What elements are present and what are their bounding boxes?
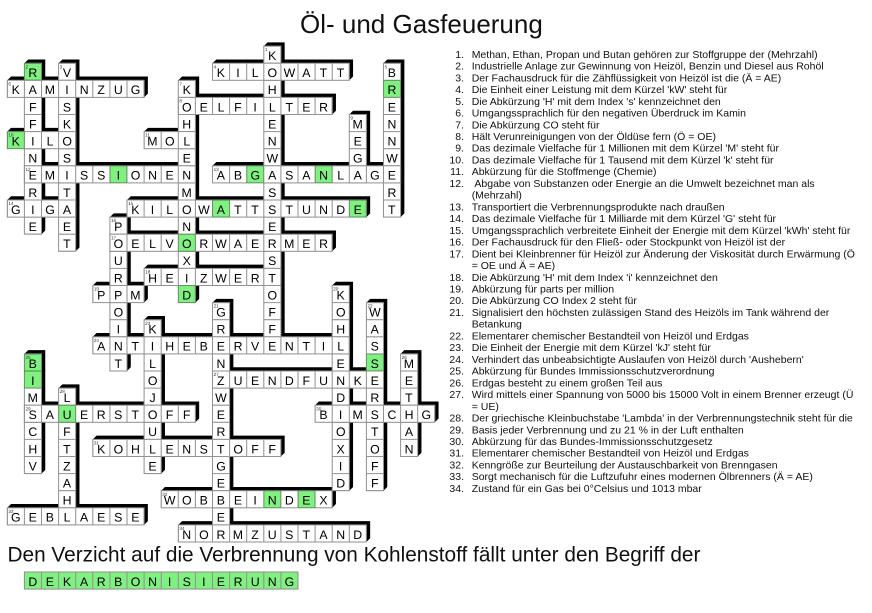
clue 22: 22. <box>449 330 464 342</box>
word 22 down: WASSERSTOFF <box>366 300 388 505</box>
clue list <box>449 49 855 495</box>
clue 30: 30. <box>449 436 464 448</box>
clue 17: Dient bei Kleinbrenner für Heizöl zur Änderung der Viskosität durch Erwärmung (Ö <box>472 248 855 260</box>
clue 13: 13. <box>449 201 464 213</box>
clue 21: 21. <box>449 307 464 319</box>
clue 23: 23. <box>449 342 464 354</box>
word 2 down: RAFFINERIE <box>24 60 48 248</box>
clue 18: 18. <box>449 272 464 284</box>
clue 19: Abkürzung für parts per million <box>472 284 614 296</box>
clue 33: 33. <box>449 471 464 483</box>
clue 3: Der Fachausdruck für die Zähflüssigkeit von Heizöl ist die (Ä = AE) <box>472 72 781 84</box>
clue 11: Abkürzung für die Stoffmenge (Chemie) <box>472 166 657 178</box>
clue 24: Verhindert das unbeabsichtigte Auslaufen von Heizöl durch 'Aushebern' <box>472 354 804 366</box>
word 6 across: KAMINZUG <box>7 77 148 111</box>
word 8 across: OELFILTER <box>178 94 336 129</box>
clue 21: Betankung <box>472 319 522 331</box>
word 32 across: WOBBEINDEX <box>161 488 337 522</box>
clue 10: 10. <box>449 154 464 166</box>
clue 20: Die Abkürzung CO Index 2 steht für <box>472 295 637 307</box>
clue 27 <box>449 389 853 413</box>
word 28 down: LUFTZAHL <box>59 385 81 539</box>
clue 12 <box>449 178 815 202</box>
clue 18: Die Abkürzung 'H' mit dem Index 'i' kennzeichnet den <box>472 272 718 284</box>
word 21 down: GRENZWERTGEBER <box>212 300 234 556</box>
word 17 across: OELVORWAERMER <box>110 231 336 265</box>
clue 2: 2. <box>455 61 464 73</box>
clue 16: Der Fachausdruck für den Fließ- oder Stockpunkt von Heizöl ist der <box>472 237 786 249</box>
clue 23: Die Einheit der Energie mit dem Kürzel 'kJ' steht für <box>472 342 711 354</box>
clue 13: Transportiert die Verbrennungsprodukte nach draußen <box>472 201 725 213</box>
clue 20: 20. <box>449 295 464 307</box>
clue 31: Elementarer chemischer Bestandteil von Heizöl und Erdgas <box>472 448 749 460</box>
word 23 down: KILOJOULE <box>144 317 168 488</box>
clue 4: Die Einheit einer Leistung mit dem Kürzel 'kW' steht für <box>472 84 728 96</box>
crossword grid <box>7 34 439 556</box>
clue 14: Das dezimale Vielfache für 1 Milliarde mit dem Kürzel 'G' steht für <box>472 213 777 225</box>
clue 12: 12. <box>449 178 464 190</box>
clue 8: Hält Verunreinigungen von der Öldüse fern (Ö = OE) <box>472 131 716 143</box>
clue 28: 28. <box>449 412 464 424</box>
word 11 across: MOL <box>144 129 200 163</box>
clue 5: 5. <box>455 96 464 108</box>
word 31 across: KOHLENSTOFF <box>93 436 286 471</box>
word 5 down: BRENNWERT <box>384 60 405 231</box>
clue 30: Abkürzung für das Bundes-Immissionsschutzgesetz <box>472 436 713 448</box>
word 27 across: ZUENDFUNKE <box>212 368 388 402</box>
clue 32: Kenngröße zur Beurteilung der Austauschbarkeit von Brenngasen <box>472 460 778 472</box>
clue 26: 26. <box>449 377 464 389</box>
word 1 down: KOHLENWASSERSTOFFE <box>264 43 286 368</box>
clue 17: 17. <box>449 248 464 260</box>
word 18 across: HEIZWERT <box>144 265 286 300</box>
clue 19: 19. <box>449 284 464 296</box>
clue 6: 6. <box>455 108 464 120</box>
clue 16: 16. <box>449 237 464 249</box>
word 20 down: KOHLENDIOXID <box>332 282 356 505</box>
clue 2: Industrielle Anlage zur Gewinnung von Heizöl, Benzin und Diesel aus Rohöl <box>472 61 824 73</box>
word 13 across: ABGASANLAGE <box>212 163 405 197</box>
word 25 down: BIMSCHV <box>24 351 48 488</box>
clue 27: 27. <box>449 389 464 401</box>
clue 10: Das dezimale Vielfache für 1 Tausend mit dem Kürzel 'k' steht für <box>472 154 774 166</box>
highlighted solution cells <box>7 63 401 508</box>
clue 31: 31. <box>449 448 464 460</box>
word 9 down: MEGA <box>349 111 371 197</box>
word 7 down: KOHLENMONOXID <box>178 77 202 317</box>
clue 5: Die Abkürzung 'H' mit dem Index 's' kennzeichnet den <box>472 96 721 108</box>
clue 24: 24. <box>449 354 464 366</box>
clue 12: (Mehrzahl) <box>472 190 522 202</box>
clue 22: Elementarer chemischer Bestandteil von Heizöl und Erdgas <box>472 330 749 342</box>
clue 25: 25. <box>449 366 464 378</box>
word 15 across: KILOWATTSTUNDE <box>127 197 371 231</box>
clue 1: Methan, Ethan, Propan und Butan gehören zur Stoffgruppe der (Mehrzahl) <box>472 49 818 61</box>
word 24 across: ANTIHEBERVENTIL <box>93 334 354 368</box>
clue 28: Der griechische Kleinbuchstabe 'Lambda' in der Verbrennungstechnik steht für die <box>472 412 853 424</box>
clue 1: 1. <box>455 49 464 61</box>
cell shadows <box>7 42 439 542</box>
word 14 across: GIGA <box>7 197 80 231</box>
word 12 across: EMISSIONEN <box>24 163 199 197</box>
clue 17: = OE und Ä = AE) <box>472 260 555 272</box>
solution prompt: Den Verzicht auf die Verbrennung von Kohlenstoff fällt unter den Begriff der <box>8 544 700 567</box>
title: Öl- und Gasfeuerung <box>300 9 543 39</box>
clue 29: 29. <box>449 424 464 436</box>
clue 11: 11. <box>450 166 464 178</box>
clue 21: Signalisiert den höchsten zulässigen Stand des Heizöls im Tank während der <box>472 307 830 319</box>
clue 3: 3. <box>455 72 464 84</box>
clue 34: Zustand für ein Gas bei 0°Celsius und 1013 mbar <box>472 483 702 495</box>
word 34 across: NORMZUSTAND <box>178 522 370 556</box>
clue 6: Umgangssprachlich für den negativen Überdruck im Kamin <box>472 108 746 120</box>
word 19 across: PPM <box>93 282 147 317</box>
word 26 down: METHAN <box>401 351 422 471</box>
clue 25: Abkürzung für Bundes Immissionsschutzverordnung <box>472 366 715 378</box>
clue 12: Abgabe von Substanzen oder Energie an die Umwelt bezeichnet man als <box>474 178 815 190</box>
word 4 across: KILOWATT <box>212 60 354 94</box>
clue 9: Das dezimale Vielfache für 1 Millionen mit dem Kürzel 'M' steht für <box>472 143 779 155</box>
word 3 down: VISKOSITAET <box>59 60 83 265</box>
word 30 across: BIMSCHG <box>315 402 439 436</box>
clue 21 <box>449 307 830 331</box>
clue 15: Umgangssprachlich verbreitete Einheit der Energie mit dem Kürzel 'kWh' steht für <box>472 225 851 237</box>
clue 9: 9. <box>455 143 464 155</box>
solution word: DEKARBONISIERUNG <box>24 569 302 603</box>
word 33 across: GEBLAESE <box>7 505 149 539</box>
clue 32: 32. <box>449 460 464 472</box>
clue 27: = UE) <box>472 401 499 413</box>
clue 29: Basis jeder Verbrennung und zu 21 % in der Luft enthalten <box>472 424 744 436</box>
cell clue numbers <box>8 34 421 530</box>
clue 4: 4. <box>455 84 464 96</box>
clue 14: 14. <box>449 213 464 225</box>
word 16 down: POURPOINT <box>110 214 134 385</box>
clue 34: 34. <box>449 483 464 495</box>
word 29 across: SAUERSTOFF <box>24 402 200 436</box>
clue 17 <box>449 248 855 272</box>
clue 15: 15. <box>449 225 464 237</box>
clue 26: Erdgas besteht zu einem großen Teil aus <box>472 377 662 389</box>
clue 33: Sorgt mechanisch für die Luftzufuhr eines modernen Ölbrenners (Ä = AE) <box>472 471 813 483</box>
clue 7: Die Abkürzung CO steht für <box>472 119 600 131</box>
word 10 across: KILO <box>7 129 79 163</box>
clue 7: 7. <box>455 119 464 131</box>
clue 8: 8. <box>455 131 464 143</box>
clue 27: Wird mittels einer Spannung von 5000 bis 15000 Volt in einem Brenner erzeugt (Ü <box>472 389 853 401</box>
